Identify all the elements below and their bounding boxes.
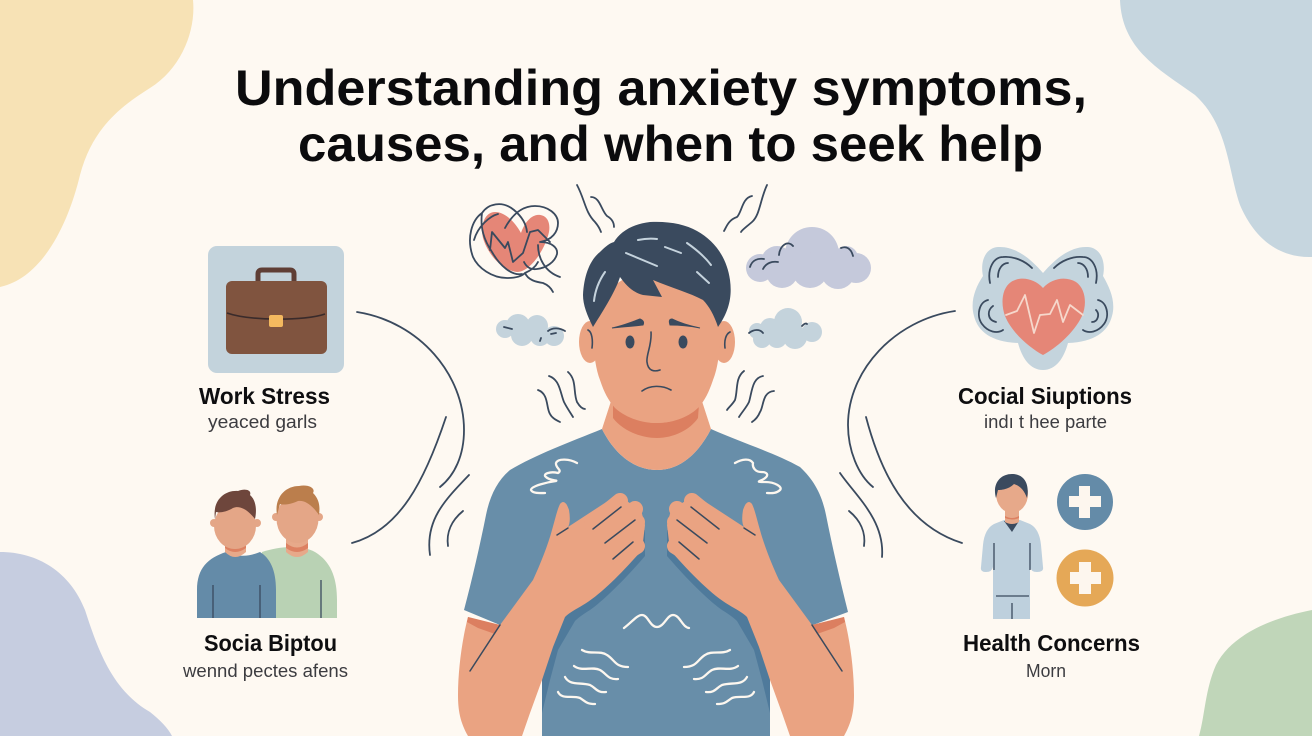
central figure: anxious man bbox=[458, 185, 854, 736]
text: heart condition caption: indı t hee parte bbox=[984, 412, 1107, 432]
eyebrows bbox=[612, 319, 700, 328]
icon: briefcase bbox=[208, 246, 344, 373]
shirt bbox=[464, 429, 848, 736]
heading: heart condition: Cocial Siuptions bbox=[958, 383, 1132, 409]
right arm and hand bbox=[667, 495, 854, 736]
arrows: left connecting curves bbox=[352, 312, 469, 555]
shirt shadow bbox=[542, 530, 645, 713]
icon: tangled heart bbox=[470, 204, 560, 292]
icon: orange plus badge bbox=[1056, 550, 1114, 606]
icon: small left cloud bbox=[496, 314, 565, 346]
face bbox=[592, 255, 722, 423]
title: Understanding anxiety symptoms, bbox=[235, 60, 1087, 116]
panel: health concerns bbox=[963, 474, 1140, 681]
heading: health concerns: Health Concerns bbox=[963, 630, 1140, 656]
arrows: right connecting curves bbox=[840, 311, 962, 557]
icon: small right cloud bbox=[749, 308, 822, 349]
neck shadow bbox=[613, 403, 699, 438]
stress lines near head bbox=[538, 185, 774, 422]
nose and mouth bbox=[588, 330, 730, 391]
icon: heart with pulse bbox=[973, 247, 1113, 370]
title: causes, and when to seek help bbox=[298, 116, 1043, 172]
icon: doctor figure bbox=[981, 474, 1043, 619]
text: health caption: Morn bbox=[1026, 661, 1066, 681]
text: work stress caption: yeaced garls bbox=[208, 412, 317, 432]
icon: two people bbox=[197, 485, 337, 618]
panel: social bbox=[182, 485, 348, 681]
heading: social: Socia Biptou bbox=[204, 630, 337, 656]
ears bbox=[579, 321, 601, 363]
left arm and hand bbox=[458, 495, 645, 736]
text: social caption: wennd pectes afens bbox=[182, 661, 348, 681]
panel: heart condition bbox=[958, 247, 1132, 432]
title bbox=[235, 60, 1087, 172]
heading: work stress: Work Stress bbox=[199, 383, 330, 409]
icon: lavender cloud bbox=[746, 227, 871, 289]
hair bbox=[583, 222, 731, 327]
white tension squiggles bbox=[531, 460, 781, 704]
panel: work stress bbox=[199, 246, 344, 432]
icon: blue plus badge bbox=[1057, 474, 1113, 530]
neck bbox=[602, 395, 711, 470]
eyes bbox=[626, 336, 688, 348]
hair highlights bbox=[594, 239, 711, 301]
